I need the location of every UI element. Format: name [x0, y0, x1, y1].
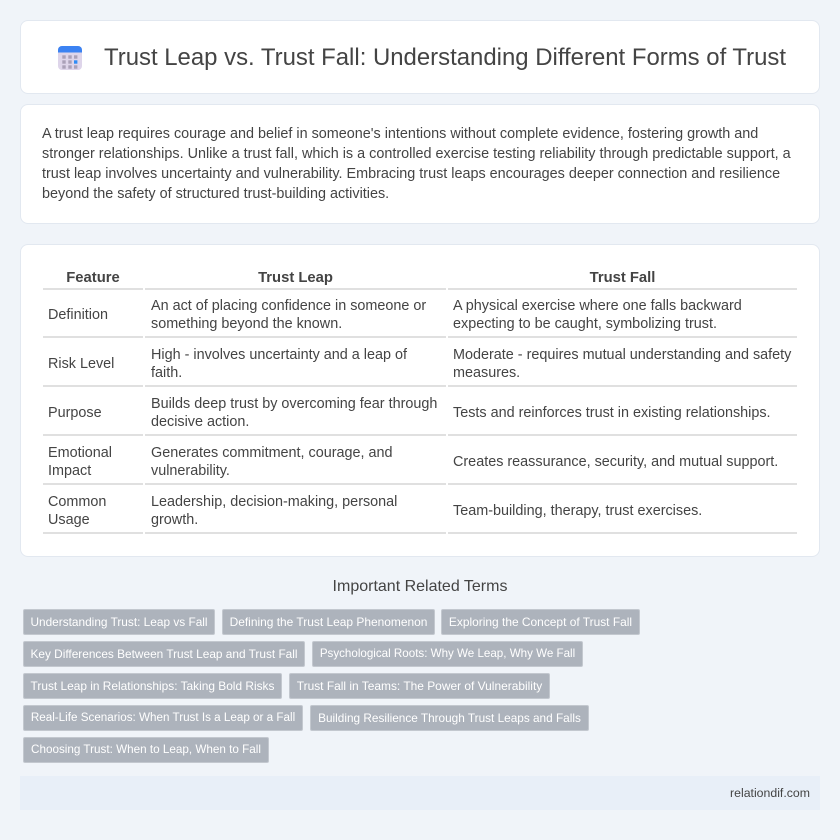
row: emotional impact: Creates reassurance, security, and mutual support.	[453, 454, 778, 470]
intro panel	[20, 104, 820, 224]
related terms tags: Trust Fall in Teams: The Power of Vulnerability	[297, 679, 542, 693]
intro paragraph: beyond the safety of structured trust-building activities.	[42, 186, 389, 202]
row: risk level	[48, 347, 792, 381]
related terms tags: Key Differences Between Trust Leap and Trust Fall	[30, 647, 298, 661]
row: risk level: High - involves uncertainty and a leap of	[151, 347, 407, 363]
row: risk level: Risk Level	[48, 356, 114, 372]
row: common usage: growth.	[151, 512, 198, 528]
intro paragraph: trust leap involves uncertainty and vulnerability. Embracing trust leaps encourages deeper connection and resilience	[42, 166, 780, 182]
related terms tags: Defining the Trust Leap Phenomenon	[230, 615, 427, 629]
icon: calendar	[58, 46, 82, 70]
related terms tags: Trust Leap in Relationships: Taking Bold Risks	[31, 679, 274, 693]
row: definition: something beyond the known.	[151, 316, 342, 332]
row: purpose: Purpose	[48, 405, 102, 421]
row: emotional impact: vulnerability.	[151, 463, 230, 479]
source label: relationdif.com	[730, 786, 810, 800]
intro paragraph	[42, 126, 791, 202]
related terms heading: Important Related Terms	[333, 578, 507, 595]
related terms tags: Exploring the Concept of Trust Fall	[449, 615, 632, 629]
intro paragraph: stronger relationships. Unlike a trust fall, which is a controlled exercise testing reliability through predictable support, a	[42, 146, 791, 162]
table header: Trust Leap	[258, 270, 333, 286]
row: common usage: Usage	[48, 512, 90, 528]
row: definition: A physical exercise where one falls backward	[453, 298, 742, 314]
related terms tags: Real-Life Scenarios: When Trust Is a Leap or a Fall	[31, 711, 295, 724]
row: risk level: Moderate - requires mutual understanding and safety	[453, 347, 791, 363]
related terms tags: Psychological Roots: Why We Leap, Why We Fall	[320, 647, 575, 660]
row: purpose	[48, 396, 771, 430]
table header	[66, 270, 655, 286]
row: definition: Definition	[48, 307, 108, 323]
row: purpose: Tests and reinforces trust in existing relationships.	[453, 405, 771, 421]
row: common usage: Common	[48, 494, 106, 510]
row: purpose: decisive action.	[151, 414, 249, 430]
row: definition	[48, 298, 742, 332]
row: common usage	[48, 494, 702, 528]
row: definition: An act of placing confidence in someone or	[151, 298, 426, 314]
related terms tags: Understanding Trust: Leap vs Fall	[30, 615, 208, 629]
related terms tags: Choosing Trust: When to Leap, When to Fall	[31, 743, 261, 756]
row: common usage: Team-building, therapy, trust exercises.	[453, 503, 702, 519]
table header: Trust Fall	[590, 270, 655, 286]
table header: Feature	[66, 270, 120, 286]
intro paragraph: A trust leap requires courage and belief in someone's intentions without complete evidence, fostering growth and	[42, 126, 758, 142]
row: purpose: Builds deep trust by overcoming fear through	[151, 396, 437, 412]
header panel	[20, 20, 820, 94]
row: emotional impact: Emotional	[48, 445, 112, 461]
footer bar	[20, 776, 820, 810]
row: emotional impact: Impact	[48, 463, 91, 479]
row: risk level: measures.	[453, 365, 520, 381]
title: Trust Leap vs. Trust Fall: Understanding Different Forms of Trust	[104, 44, 786, 71]
comparison table panel	[20, 244, 820, 557]
related terms tags: Building Resilience Through Trust Leaps and Falls	[318, 711, 581, 725]
row: common usage: Leadership, decision-making, personal	[151, 494, 397, 510]
row: emotional impact: Generates commitment, courage, and	[151, 445, 393, 461]
row: emotional impact	[48, 445, 778, 479]
row: definition: expecting to be caught, symbolizing trust.	[453, 316, 717, 332]
row: risk level: faith.	[151, 365, 182, 381]
